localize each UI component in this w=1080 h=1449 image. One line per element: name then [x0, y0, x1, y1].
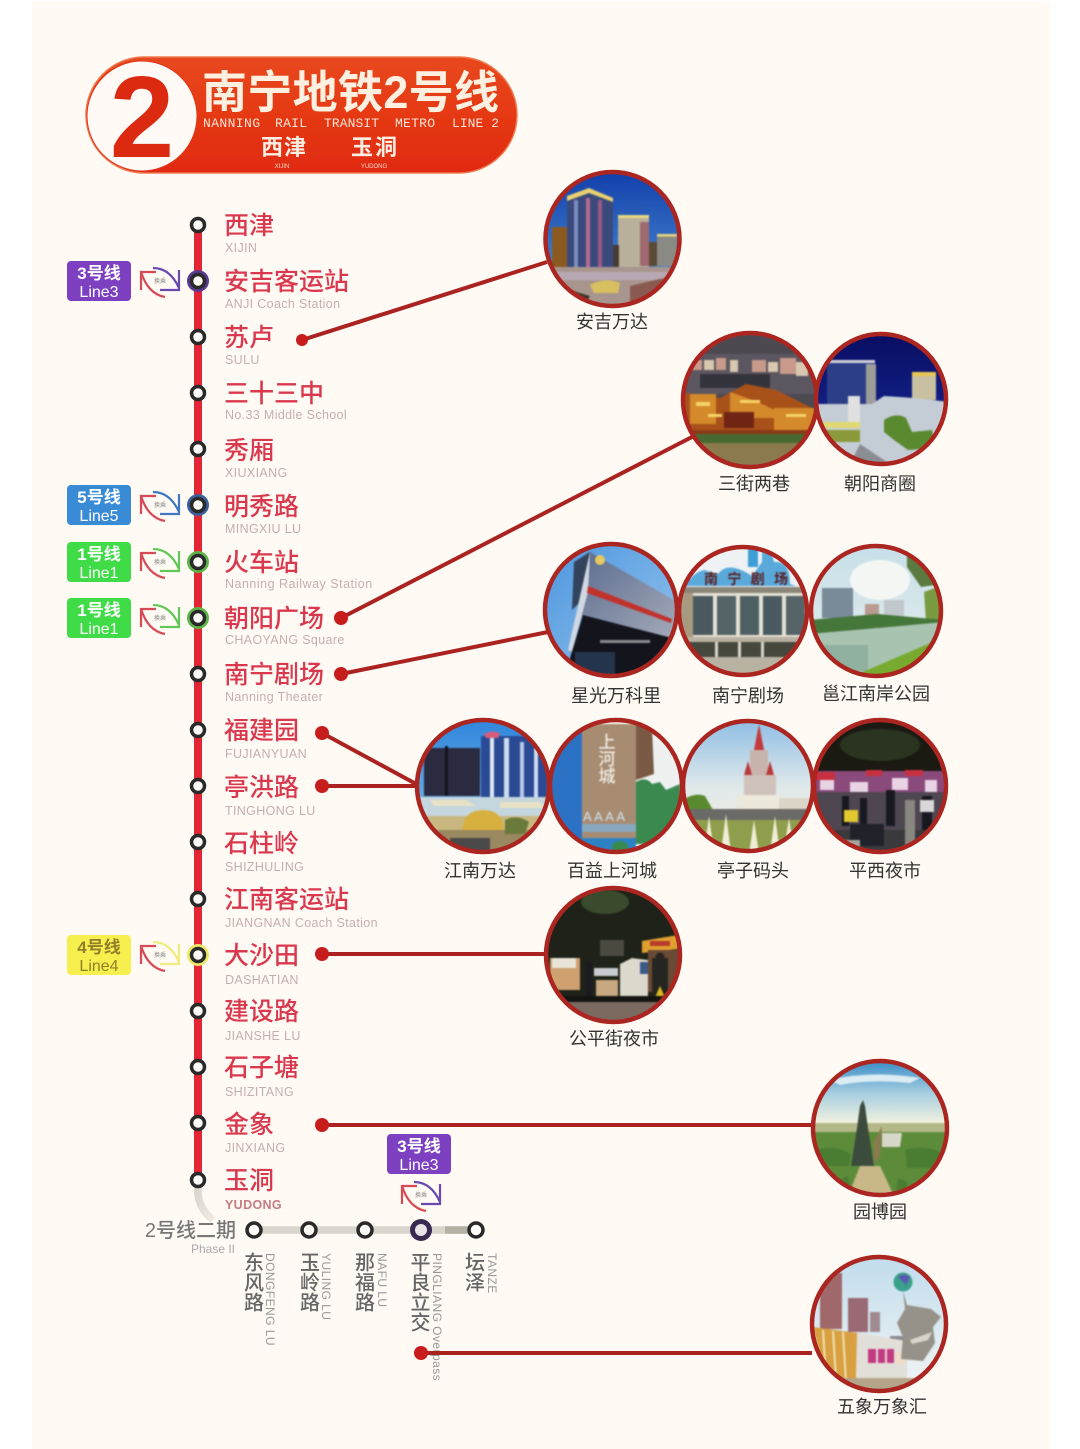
- theater roof sign: 南宁剧场: [704, 571, 788, 587]
- connector: sulu to anji wanda: [296, 262, 547, 346]
- phase II station: pingliang overpass: PINGLIANG Overpass: [430, 1253, 444, 1381]
- station: xijin: [224, 212, 274, 255]
- title banner: [86, 52, 517, 182]
- phase II station: yuling lu: YULING LU: [319, 1253, 333, 1320]
- transfer badge: line 5 at mingxiu lu: 5号线: [77, 488, 121, 507]
- photo: sanjie lianghang: [680, 330, 820, 494]
- station: nanning theater: Nanning Theater: [225, 690, 323, 704]
- station: jinxiang: JINXIANG: [225, 1141, 285, 1155]
- station markers: [187, 218, 209, 1186]
- phase II heading: Phase II: [191, 1242, 235, 1256]
- transfer badge: line 4 at dashatian: [67, 935, 179, 975]
- station: jianshe lu: [224, 998, 301, 1043]
- station: sulu: [224, 324, 274, 367]
- station: sulu: 苏卢: [224, 324, 274, 352]
- station: anji: 安吉客运站: [224, 268, 349, 296]
- phase II station: pingliang overpass: [407, 1252, 444, 1381]
- transfer badge: line 3 at pingliang: 换乘: [415, 1191, 427, 1199]
- caption: 安吉万达: [576, 312, 648, 332]
- caption: 邕江南岸公园: [822, 684, 930, 704]
- photo: baiyi shanghe city: 城: [598, 767, 616, 786]
- connector: theater to xingguang: [334, 632, 548, 681]
- building sign: 上: [598, 733, 616, 752]
- caption: 五象万象汇: [837, 1397, 927, 1417]
- station: nanning theater: [224, 661, 324, 704]
- transfer badge: line 1 at railway station: 1号线: [77, 545, 121, 564]
- station: mingxiu lu: MINGXIU LU: [225, 522, 301, 536]
- photo: baiyi shanghe city: [548, 720, 686, 881]
- transfer badge: line 3 at anji: Line3: [79, 284, 119, 301]
- station: jinxiang: [224, 1111, 285, 1155]
- connector: pingliang to wuxiang: [414, 1346, 812, 1360]
- transfer badge: line 4 at dashatian: 4号线: [77, 938, 121, 957]
- connector: jinxiang to expo garden: [315, 1118, 813, 1132]
- station: fujianyuan: [224, 717, 307, 761]
- photo: nanning theater: [678, 545, 810, 706]
- station: shizhuling: [224, 830, 304, 874]
- transfer badge: line 3 at anji: 换乘: [154, 277, 166, 285]
- phase II station: dongfeng lu: [240, 1252, 277, 1346]
- station: yudong: YUDONG: [225, 1198, 282, 1212]
- line number 2: 2: [110, 52, 174, 182]
- photo: anji wanda: [543, 170, 682, 330]
- banner english subtitle: LINE 2: [452, 116, 499, 131]
- photo: yongjiang south bank park: [808, 545, 946, 704]
- banner english subtitle: TRANSIT: [324, 116, 379, 131]
- connector: dashatian to gongping night market: [315, 947, 546, 961]
- connector: tinghong lu to jiangnan wanda: [315, 779, 418, 793]
- transfer badge: line 3 at pingliang: Line3: [399, 1157, 439, 1174]
- terminus yudong: 玉洞: [351, 135, 397, 160]
- station: chaoyang square: CHAOYANG Square: [225, 633, 345, 647]
- transfer badge: line 3 at anji: [67, 261, 179, 301]
- connector: chaoyang square to sanjie lianghang: [334, 437, 692, 625]
- station: mingxiu lu: 明秀路: [224, 493, 299, 521]
- station: no.33 middle school: 三十三中: [224, 380, 324, 408]
- phase II heading: [145, 1219, 236, 1256]
- station: xiuxiang: XIUXIANG: [225, 466, 288, 480]
- photo: tingzi wharf: [680, 718, 816, 881]
- station: railway station: Nanning Railway Station: [225, 577, 373, 591]
- connector: fujianyuan to jiangnan wanda: [315, 726, 418, 785]
- station: shizitang: SHIZITANG: [225, 1085, 294, 1099]
- transfer badge: line 1 at chaoyang square: 1号线: [77, 601, 121, 620]
- phase II station: tanze: TANZE: [485, 1253, 499, 1294]
- phase II station: tanze: 坛泽: [462, 1252, 484, 1292]
- phase II heading: 2号线二期: [145, 1219, 236, 1242]
- caption: 公平街夜市: [569, 1029, 659, 1049]
- caption: 平西夜市: [849, 861, 921, 881]
- phase II station: nafu lu: NAFU LU: [375, 1253, 389, 1308]
- banner title: 南宁地铁2号线: [202, 67, 499, 118]
- phase II station: dongfeng lu: 东风路: [240, 1252, 264, 1312]
- station: jiangnan coach station: [224, 886, 378, 930]
- phase II station: yuling lu: 玉岭路: [296, 1252, 320, 1312]
- station: xiuxiang: 秀厢: [224, 437, 274, 465]
- phase II station: nafu lu: [352, 1252, 389, 1312]
- phase II station: nafu lu: 那福路: [352, 1252, 374, 1312]
- terminus xijin: 西津: [261, 135, 306, 160]
- transfer badge: line 3 at anji: 3号线: [77, 264, 121, 283]
- caption: 江南万达: [444, 861, 516, 881]
- station: shizitang: 石子塘: [224, 1054, 299, 1082]
- station: tinghong lu: [224, 774, 316, 818]
- transfer badge: line 4 at dashatian: 换乘: [154, 951, 166, 959]
- station: dashatian: DASHATIAN: [225, 973, 299, 987]
- transfer badge: line 5 at mingxiu lu: Line5: [79, 508, 119, 525]
- station: yudong: [224, 1167, 282, 1212]
- station: mingxiu lu: [224, 493, 301, 536]
- station: no.33 middle school: [224, 380, 347, 422]
- station: tinghong lu: TINGHONG LU: [225, 804, 316, 818]
- transfer badge: line 4 at dashatian: Line4: [79, 958, 119, 975]
- banner english subtitle: RAIL: [275, 116, 307, 131]
- station: anji: ANJI Coach Station: [225, 297, 340, 311]
- photo: xingguang vanke li: [540, 540, 685, 706]
- terminus yudong english: YUDONG: [361, 164, 387, 170]
- phase II station markers: [247, 1219, 483, 1241]
- station: anji: [224, 268, 349, 311]
- caption: 园博园: [853, 1202, 907, 1222]
- station: xijin: XIJIN: [225, 241, 257, 255]
- phase II station: tanze: [462, 1252, 499, 1294]
- station: xijin: 西津: [224, 212, 274, 240]
- transfer badge: line 1 at railway station: 换乘: [154, 558, 166, 566]
- station: jinxiang: 金象: [224, 1111, 274, 1139]
- station: fujianyuan: 福建园: [224, 717, 299, 745]
- caption: 南宁剧场: [712, 686, 784, 706]
- station: tinghong lu: 亭洪路: [224, 774, 299, 802]
- photo: expo garden: [810, 1058, 950, 1222]
- phase II station: pingliang overpass: 平良立交: [407, 1252, 430, 1332]
- station: yudong: 玉洞: [224, 1167, 274, 1195]
- station: sulu: SULU: [225, 353, 260, 367]
- station: xiuxiang: [224, 437, 288, 480]
- photo: baiyi shanghe city: 河: [598, 750, 616, 769]
- photo: wuxiang wanxianghui: [810, 1256, 950, 1417]
- station: railway station: [224, 549, 373, 591]
- phase II grey line: [198, 1180, 476, 1230]
- station: jiangnan coach station: 江南客运站: [224, 886, 349, 914]
- station: fujianyuan: FUJIANYUAN: [225, 747, 307, 761]
- station: chaoyang square: 朝阳广场: [224, 605, 324, 633]
- transfer badge: line 5 at mingxiu lu: [67, 485, 179, 525]
- transfer badge: line 5 at mingxiu lu: 换乘: [154, 501, 166, 509]
- station: dashatian: [224, 942, 299, 987]
- terminus xijin english: XIJIN: [275, 164, 289, 170]
- photo: pingxi night market: [812, 718, 948, 881]
- caption: 三街两巷: [718, 474, 790, 494]
- station: chaoyang square: [224, 605, 345, 647]
- transfer badge: line 3 at pingliang: [387, 1134, 451, 1211]
- station: shizitang: [224, 1054, 299, 1099]
- phase II station: dongfeng lu: DONGFENG LU: [263, 1253, 277, 1346]
- photo: baiyi shanghe city: AAAA: [583, 809, 625, 824]
- banner english subtitle: METRO: [395, 116, 435, 131]
- station: shizhuling: SHIZHULING: [225, 860, 304, 874]
- photo: chaoyang business district: [812, 330, 952, 494]
- transfer badge: line 3 at pingliang: 3号线: [397, 1137, 441, 1156]
- transfer badge: line 1 at chaoyang square: 换乘: [154, 614, 166, 622]
- photo: gongping street night market: [544, 886, 682, 1049]
- banner english subtitle: [203, 116, 499, 131]
- transfer badge: line 1 at railway station: Line1: [79, 565, 119, 582]
- station: jianshe lu: 建设路: [224, 998, 299, 1026]
- caption: 亭子码头: [717, 861, 789, 881]
- transfer badge: line 1 at railway station: [67, 542, 179, 582]
- station: railway station: 火车站: [224, 549, 299, 577]
- phase II station: yuling lu: [296, 1252, 333, 1320]
- station: jianshe lu: JIANSHE LU: [225, 1029, 301, 1043]
- red metro line 2: [194, 225, 202, 1180]
- photo: jiangnan wanda: [414, 718, 554, 881]
- station: shizhuling: 石柱岭: [224, 830, 299, 858]
- banner english subtitle: NANNING: [203, 116, 260, 131]
- station: no.33 middle school: No.33 Middle School: [225, 408, 347, 422]
- station: dashatian: 大沙田: [224, 942, 299, 970]
- caption: 星光万科里: [571, 686, 661, 706]
- station: nanning theater: 南宁剧场: [224, 661, 324, 689]
- station: jiangnan coach station: JIANGNAN Coach Station: [225, 916, 378, 930]
- transfer badge: line 1 at chaoyang square: [67, 598, 179, 638]
- caption: 朝阳商圈: [844, 474, 916, 494]
- transfer badge: line 1 at chaoyang square: Line1: [79, 621, 119, 638]
- station labels: [224, 212, 378, 1212]
- caption: 百益上河城: [567, 861, 657, 881]
